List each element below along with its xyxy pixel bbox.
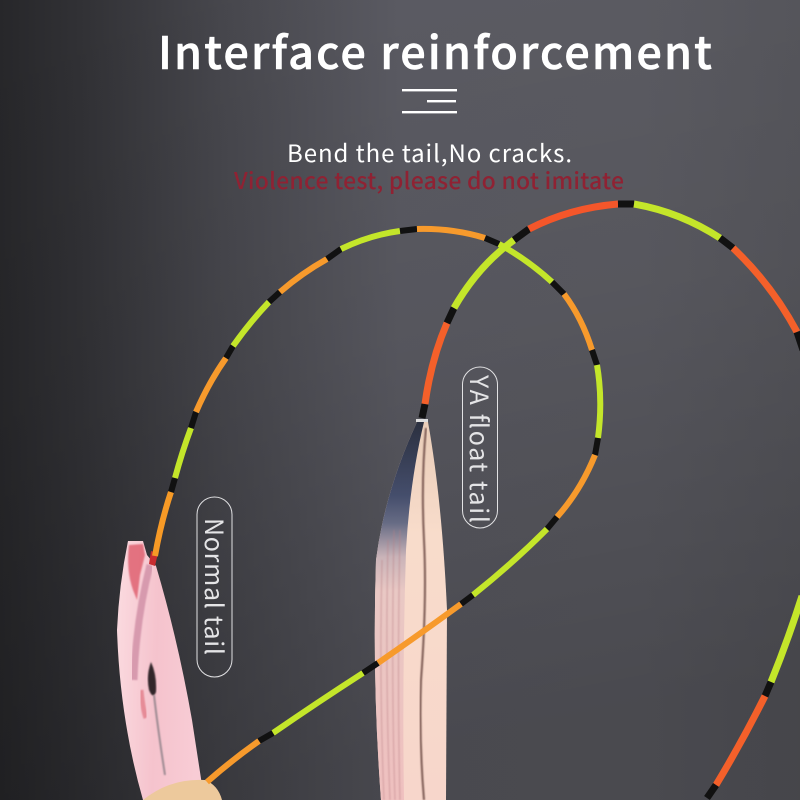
label: Normal tail: Normal tail (197, 518, 233, 655)
feather: normal tail, cracked (117, 541, 202, 800)
label: YA float tail: YA float tail (462, 374, 498, 523)
icon: three-line divider (402, 89, 457, 113)
segmented float tail: YA (422, 204, 800, 798)
finger holding the feather (143, 780, 222, 800)
title: Interface reinforcement (158, 17, 712, 82)
feather: YA float (375, 419, 447, 800)
subtitle: Bend the tail,No cracks. (287, 134, 572, 169)
warning text: Violence test, please do not imitate (233, 162, 624, 196)
segmented float tail: normal (155, 229, 600, 782)
